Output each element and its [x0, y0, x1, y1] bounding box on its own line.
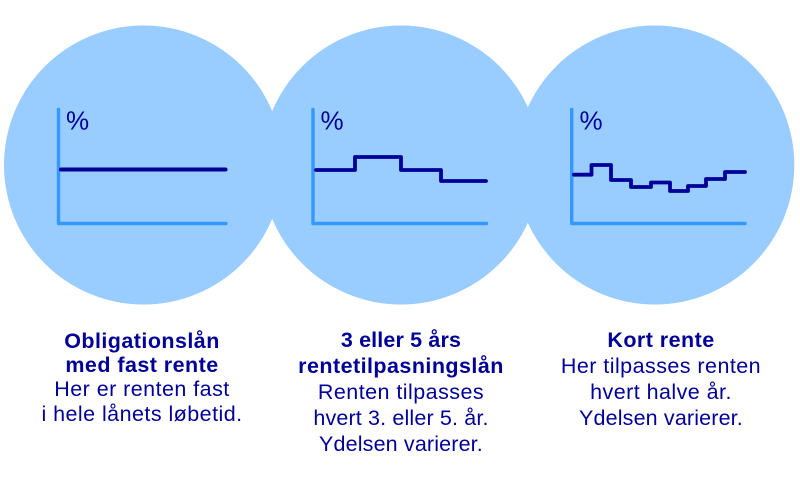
caption: short rate loan: Ydelsen varierer. [579, 406, 743, 430]
axes [58, 110, 226, 224]
caption: short rate loan [561, 328, 761, 430]
circle: adjustable rate [261, 26, 540, 304]
circle: fixed rate [4, 26, 283, 304]
caption: adjustable rate loan: hvert 3. eller 5. år. [313, 406, 489, 430]
caption: short rate loan: hvert halve år. [590, 380, 732, 404]
caption: adjustable rate loan: Ydelsen varierer. [319, 432, 483, 456]
caption: short rate loan: Her tilpasses renten [561, 354, 761, 378]
percent label: % [320, 106, 344, 136]
chart: fixed rate [58, 106, 226, 224]
caption: adjustable rate loan: Renten tilpasses [318, 380, 484, 404]
caption: fixed rate loan: Her er renten fast [54, 377, 230, 401]
percent label: % [66, 106, 89, 136]
rate line [316, 157, 486, 181]
caption: fixed rate loan: med fast rente [65, 353, 219, 377]
caption: fixed rate loan: Obligationslån [64, 328, 220, 352]
chart: 3 or 5 year adjustable rate [313, 106, 486, 224]
chart: short rate [572, 106, 745, 224]
caption: adjustable rate loan [298, 328, 504, 456]
caption: adjustable rate loan: 3 eller 5 års [341, 328, 461, 352]
caption: fixed rate loan [41, 328, 243, 426]
percent label: % [580, 106, 603, 136]
circle: short rate [515, 26, 794, 304]
caption: adjustable rate loan: rentetilpasningslån [298, 354, 504, 378]
rate line [574, 165, 745, 191]
caption: short rate loan: Kort rente [607, 328, 715, 352]
axes [572, 110, 745, 224]
axes [313, 110, 486, 224]
rate line [61, 168, 226, 172]
caption: fixed rate loan: i hele lånets løbetid. [41, 402, 243, 426]
